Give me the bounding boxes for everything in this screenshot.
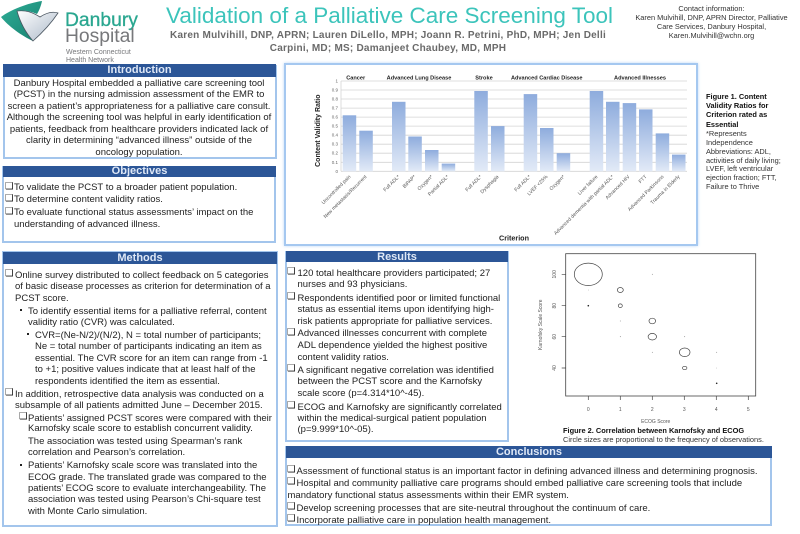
panel: bar chart figure 1: [284, 63, 698, 246]
logo: Danbury Hospital: Hospital: [65, 26, 135, 47]
objectives list: ❑: [5, 193, 14, 204]
panel: results: within the medical-surgical patient population: [298, 413, 487, 424]
panel: results: Respondents identified poor or limited functional: [298, 292, 500, 304]
logo: Danbury Hospital: Western Connecticut: [66, 49, 131, 56]
panel: methods: respondents identified the item as essential.: [35, 376, 220, 387]
bar chart: content validity ratio: Stroke: [475, 76, 493, 82]
panel: methods: [2, 251, 278, 527]
contact information: Care Services, Danbury Hospital,: [657, 22, 766, 31]
bar chart: content validity ratio: 0: [335, 169, 338, 174]
panel: results: ❑: [287, 291, 296, 302]
panel: objectives: [2, 166, 276, 243]
panel: results: ❑: [287, 363, 296, 374]
figure 1 caption: activities of daily living;: [706, 156, 781, 164]
bar chart: content validity ratio: 1: [335, 78, 338, 84]
panel: methods: with Monte Carlo simulation.: [28, 506, 147, 517]
introduction text: [6, 78, 272, 158]
bar chart: content validity ratio: Oxygen*: [549, 174, 566, 192]
figure 1 caption: LVEF, left ventricular: [706, 164, 773, 173]
contact information: Karen.Mulvihill@wchn.org: [669, 31, 754, 40]
panel: conclusions: ❑: [287, 501, 296, 512]
objectives list: ❑: [5, 206, 14, 217]
heading: conclusions: Conclusions: [496, 446, 562, 458]
logo: Danbury Hospital: Health Network: [66, 56, 114, 64]
scatter plot: Karnofsky vs ECOG: Karnofsky Scale Score: [538, 299, 544, 350]
figure 1 caption: *Represents: [706, 128, 747, 138]
bar chart: content validity ratio: 0.5: [332, 124, 338, 129]
panel: results: A significant negative correlation was identified: [298, 364, 494, 376]
heading: methods: Methods: [117, 252, 163, 264]
panel: results: ❑: [287, 266, 296, 277]
panel: results: 120 total healthcare providers participated; 27: [298, 268, 490, 279]
bar chart: content validity ratio: Cancer: [346, 76, 366, 82]
bar chart: content validity ratio: Content Validity Ratio: [315, 95, 322, 167]
panel: conclusions: ❑: [287, 476, 296, 487]
bar chart: content validity ratio: 0.9: [332, 88, 338, 92]
bar chart: content validity ratio: LVEF <25%: [526, 174, 550, 197]
panel: conclusions: Develop screening processes that are site-neutral throughout the continuum of care.: [296, 503, 650, 514]
scatter plot: Karnofsky vs ECOG: 1: [619, 407, 622, 413]
scatter plot: Karnofsky vs ECOG: 100: [552, 270, 558, 278]
panel: results: ADL dependence yielded the highest positive: [298, 340, 487, 351]
figure 2 caption: Circle sizes are proportional to the frequency of observations.: [563, 435, 764, 444]
bar chart: content validity ratio: Full ADL*: [382, 174, 401, 193]
panel: conclusions: mandatory functional status assessments within their EMR system.: [288, 490, 569, 501]
panel: methods: ❑: [5, 268, 14, 279]
figure 1 caption: Validity Ratios for: [706, 101, 768, 110]
heading: conclusions: [286, 446, 772, 458]
panel: methods: Ne = total number of participants indicating an item as: [35, 341, 262, 352]
panel: methods: validity ratio (CVR) was calculated.: [28, 317, 175, 328]
logo: Danbury Hospital: [1, 1, 138, 64]
bar chart: content validity ratio: Advanced Illnesses: [614, 76, 666, 82]
bar chart: content validity ratio: BiPAP*: [402, 174, 417, 190]
panel: methods: The association was tested using Spearman’s rank: [28, 436, 242, 447]
bar chart: content validity ratio: FTT: [638, 174, 648, 185]
panel: conclusions: [285, 446, 772, 526]
introduction text: oncology population.: [95, 147, 183, 158]
objectives list: ❑: [5, 181, 14, 192]
contact information: Contact information:: [678, 4, 745, 13]
scatter plot: Karnofsky vs ECOG: 4: [715, 407, 718, 413]
scatter plot: Karnofsky vs ECOG: 0: [587, 407, 590, 413]
bar chart: content validity ratio: Advanced Cardiac Disease: [511, 76, 582, 82]
panel: methods: To identify essential items for a palliative referral, content: [28, 306, 267, 317]
bar chart: content validity ratio: 0.1: [332, 160, 338, 165]
logo: Danbury Hospital: Danbury: [65, 10, 138, 31]
panel: results: status as essential items upon identifying high-: [298, 304, 494, 315]
scatter plot: Karnofsky vs ECOG: 40: [552, 365, 558, 371]
scatter plot: Karnofsky vs ECOG: ECOG Score: [641, 419, 671, 425]
panel: results: between the PCST score and the Karnofsky: [298, 376, 482, 387]
panel: results: nurses and 93 physicians.: [298, 279, 407, 290]
panel: results: ❑: [287, 400, 296, 411]
bar chart: content validity ratio: 0.3: [332, 142, 338, 147]
bar chart: content validity ratio: 0.4: [332, 133, 338, 138]
scatter plot: Karnofsky vs ECOG: 5: [747, 407, 750, 413]
panel: results: ❑: [287, 327, 296, 338]
methods text: [5, 268, 272, 517]
objectives list: [5, 181, 253, 230]
figure 1 caption: Criterion rated as: [706, 110, 767, 119]
bar chart: content validity ratio: 0.2: [332, 151, 338, 156]
figure 1 caption: ejection fraction; FTT,: [706, 173, 777, 182]
panel: conclusions: Assessment of functional status is an important factor in defining advanced illness and determining prognosis.: [296, 466, 758, 477]
panel: results: ECOG and Karnofsky are significantly correlated: [298, 402, 502, 412]
panel: conclusions: Incorporate palliative care in population health management.: [296, 515, 551, 526]
heading: objectives: [3, 166, 276, 177]
figure 1 caption: Figure 1. Content: [706, 92, 767, 101]
introduction text: screen a patient’s appropriateness for a palliative care consult.: [8, 101, 270, 112]
contact information: Karen Mulvihill, DNP, APRN Director, Palliative: [635, 13, 788, 22]
scatter plot: Karnofsky vs ECOG: [538, 253, 756, 425]
heading: results: [286, 251, 508, 262]
scatter plot: Karnofsky vs ECOG: 80: [552, 303, 558, 308]
bar chart: content validity ratio: Full ADL*: [464, 174, 483, 193]
bar chart: content validity ratio: Liver failure: [577, 174, 600, 197]
heading: introduction: [3, 64, 276, 77]
panel: conclusions: ❑: [287, 513, 296, 524]
title: Validation of a Palliative Care Screening Tool: [166, 3, 613, 28]
panel: methods: ECOG grade. The translated grade was compared to the: [28, 472, 267, 483]
panel: methods: Karnofsky scale score to establish concurrent validity.: [28, 423, 253, 434]
figure 2 caption: [563, 426, 764, 444]
objectives list: To evaluate functional status assessments’ impact on the: [14, 207, 253, 218]
panel: results: scale score (p=4.314*10^-45).: [298, 388, 424, 399]
bar chart: content validity ratio: Advanced dementia with partial ADL*: [553, 174, 615, 237]
panel: methods: patients’ ECOG score to evaluate interchangeability. The: [28, 483, 266, 494]
panel: methods: ❑: [5, 387, 14, 398]
panel: results: content validity ratios.: [298, 352, 389, 363]
conclusions list: [287, 464, 758, 526]
bar chart: content validity ratio: Advanced HIV: [605, 174, 632, 201]
panel: methods: ❑: [19, 411, 28, 422]
panel: methods: association was tested using Pearson’s Chi-square test: [28, 494, 261, 505]
panel: methods: Patients’ assigned PCST scores were compared with their: [28, 413, 272, 424]
bar chart: content validity ratio: 0.8: [332, 96, 338, 102]
panel: methods: of basic disease processes as criterion for determination of a: [15, 281, 271, 292]
panel: conclusions: ❑: [287, 464, 296, 475]
authors: Karen Mulvihill, DNP, APRN; Lauren DiLello, MPH; Joann R. Petrini, PhD, MPH; Jen Delli: [170, 30, 606, 41]
figure 1 caption: Independence: [706, 138, 753, 146]
panel: methods: Patients’ Karnofsky scale score was translated into the: [28, 460, 257, 471]
introduction text: clarity in determining “advanced illness” outside of the: [26, 135, 252, 146]
bar chart: content validity ratio: Advanced Parkinsons: [627, 174, 666, 213]
panel: results: Advanced illnesses concurrent with complete: [298, 328, 487, 339]
panel: results: risk patients appropriate for palliative services.: [298, 316, 492, 327]
objectives list: understanding of advanced illness.: [14, 219, 160, 230]
panel: methods: PCST score.: [15, 293, 69, 304]
authors: [170, 30, 606, 54]
figure 1 caption: Abbreviations: ADL,: [706, 146, 771, 156]
bar chart: content validity ratio: Trauma in Elderly: [650, 174, 682, 206]
introduction text: Danbury Hospital embedded a palliative care screening tool: [14, 78, 264, 89]
heading: methods: [3, 252, 277, 264]
authors: Carpini, MD; MS; Damanjeet Chaubey, MD, MPH: [270, 43, 506, 54]
figure 2 caption: Figure 2. Correlation between Karnofsky and ECOG: [563, 426, 744, 435]
introduction text: (PCST) in the nursing admission assessment of the EMR to: [14, 89, 264, 100]
introduction text: Although the screening tool was helpful in early identification of: [7, 112, 271, 123]
introduction text: patients, feedback from healthcare providers indicated lack of: [10, 124, 268, 135]
scatter plot: Karnofsky vs ECOG: 2: [651, 407, 654, 413]
panel: results: (p=9.999*10^-05).: [298, 424, 374, 435]
scatter plot: Karnofsky vs ECOG: 60: [552, 334, 558, 339]
objectives list: To determine content validity ratios.: [14, 194, 163, 205]
bar chart: content validity ratio: Partial ADL*: [427, 174, 450, 197]
bar chart: content validity ratio: Uncontrolled pain: [321, 174, 353, 206]
bar chart: content validity ratio: Full ADL*: [513, 174, 532, 193]
panel: methods: In addition, retrospective data analysis was conducted on a: [15, 389, 264, 400]
panel: methods: CVR=(Ne-N/2)/(N/2), N = total number of participants;: [35, 330, 261, 341]
panel: introduction: [3, 65, 277, 159]
heading: introduction: Introduction: [107, 64, 172, 76]
panel: methods: essential. The CVR score for an item can range from -1: [35, 353, 268, 364]
bar chart: content validity ratio: Criterion: [499, 234, 529, 242]
panel: results: [285, 251, 509, 442]
panel: conclusions: Hospital and community palliative care programs should embed palliative care screening tools that include: [296, 478, 742, 489]
figure 1 caption: [706, 92, 781, 190]
panel: methods: to +1; positive values indicate that at least half of the: [35, 364, 256, 375]
scatter plot: Karnofsky vs ECOG: 3: [683, 407, 686, 413]
figure 1 caption: Failure to Thrive: [706, 182, 759, 190]
panel: methods: correlation and Pearson’s correlation.: [28, 447, 185, 458]
bar chart: content validity ratio: Dysphagia: [479, 174, 501, 195]
figure 1 caption: Essential: [706, 120, 738, 128]
objectives list: To validate the PCST to a broader patient population.: [14, 182, 237, 193]
bar chart: content validity ratio: New metastasis/Recurrent: [323, 174, 369, 220]
panel: methods: subsample of all patients admitted June – December 2015.: [15, 400, 263, 411]
bar chart: content validity ratio: Advanced Lung Disease: [387, 76, 451, 82]
bar chart: content validity ratio: [314, 76, 687, 242]
bar chart: content validity ratio: 0.7: [332, 106, 338, 111]
bar chart: content validity ratio: Oxygen*: [417, 174, 434, 192]
results list: [287, 266, 502, 435]
contact information: [635, 4, 788, 40]
panel: methods: Online survey distributed to collect feedback on 5 categories: [15, 270, 268, 281]
bar chart: content validity ratio: 0.6: [332, 115, 338, 120]
